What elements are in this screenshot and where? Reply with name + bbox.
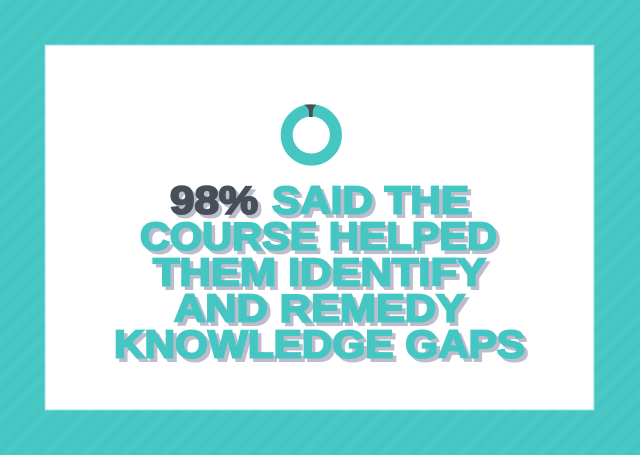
heading percentage in dark: 98% [170,180,258,222]
heading shadow layer: SAID THE [276,183,472,226]
heading teal lines [114,180,525,366]
heading teal lines: KNOWLEDGE GAPS [114,324,525,366]
icon: donut chart 98% [287,104,336,160]
heading shadow layer: KNOWLEDGE GAPS [118,327,528,370]
heading shadow layer: 98% [174,183,262,226]
heading: 98% said the course helped them identify and remedy knowledge gaps [114,180,528,370]
heading teal lines: AND REMEDY [174,288,465,330]
heading shadow layer: AND REMEDY [178,291,469,334]
heading shadow layer: THEM IDENTIFY [156,255,490,298]
heading teal lines: SAID THE [272,180,469,222]
heading shadow layer [118,183,528,370]
heading teal lines: THEM IDENTIFY [153,252,486,294]
heading teal lines: COURSE HELPED [140,216,497,258]
white card panel [45,45,594,410]
heading shadow layer: COURSE HELPED [144,219,500,262]
